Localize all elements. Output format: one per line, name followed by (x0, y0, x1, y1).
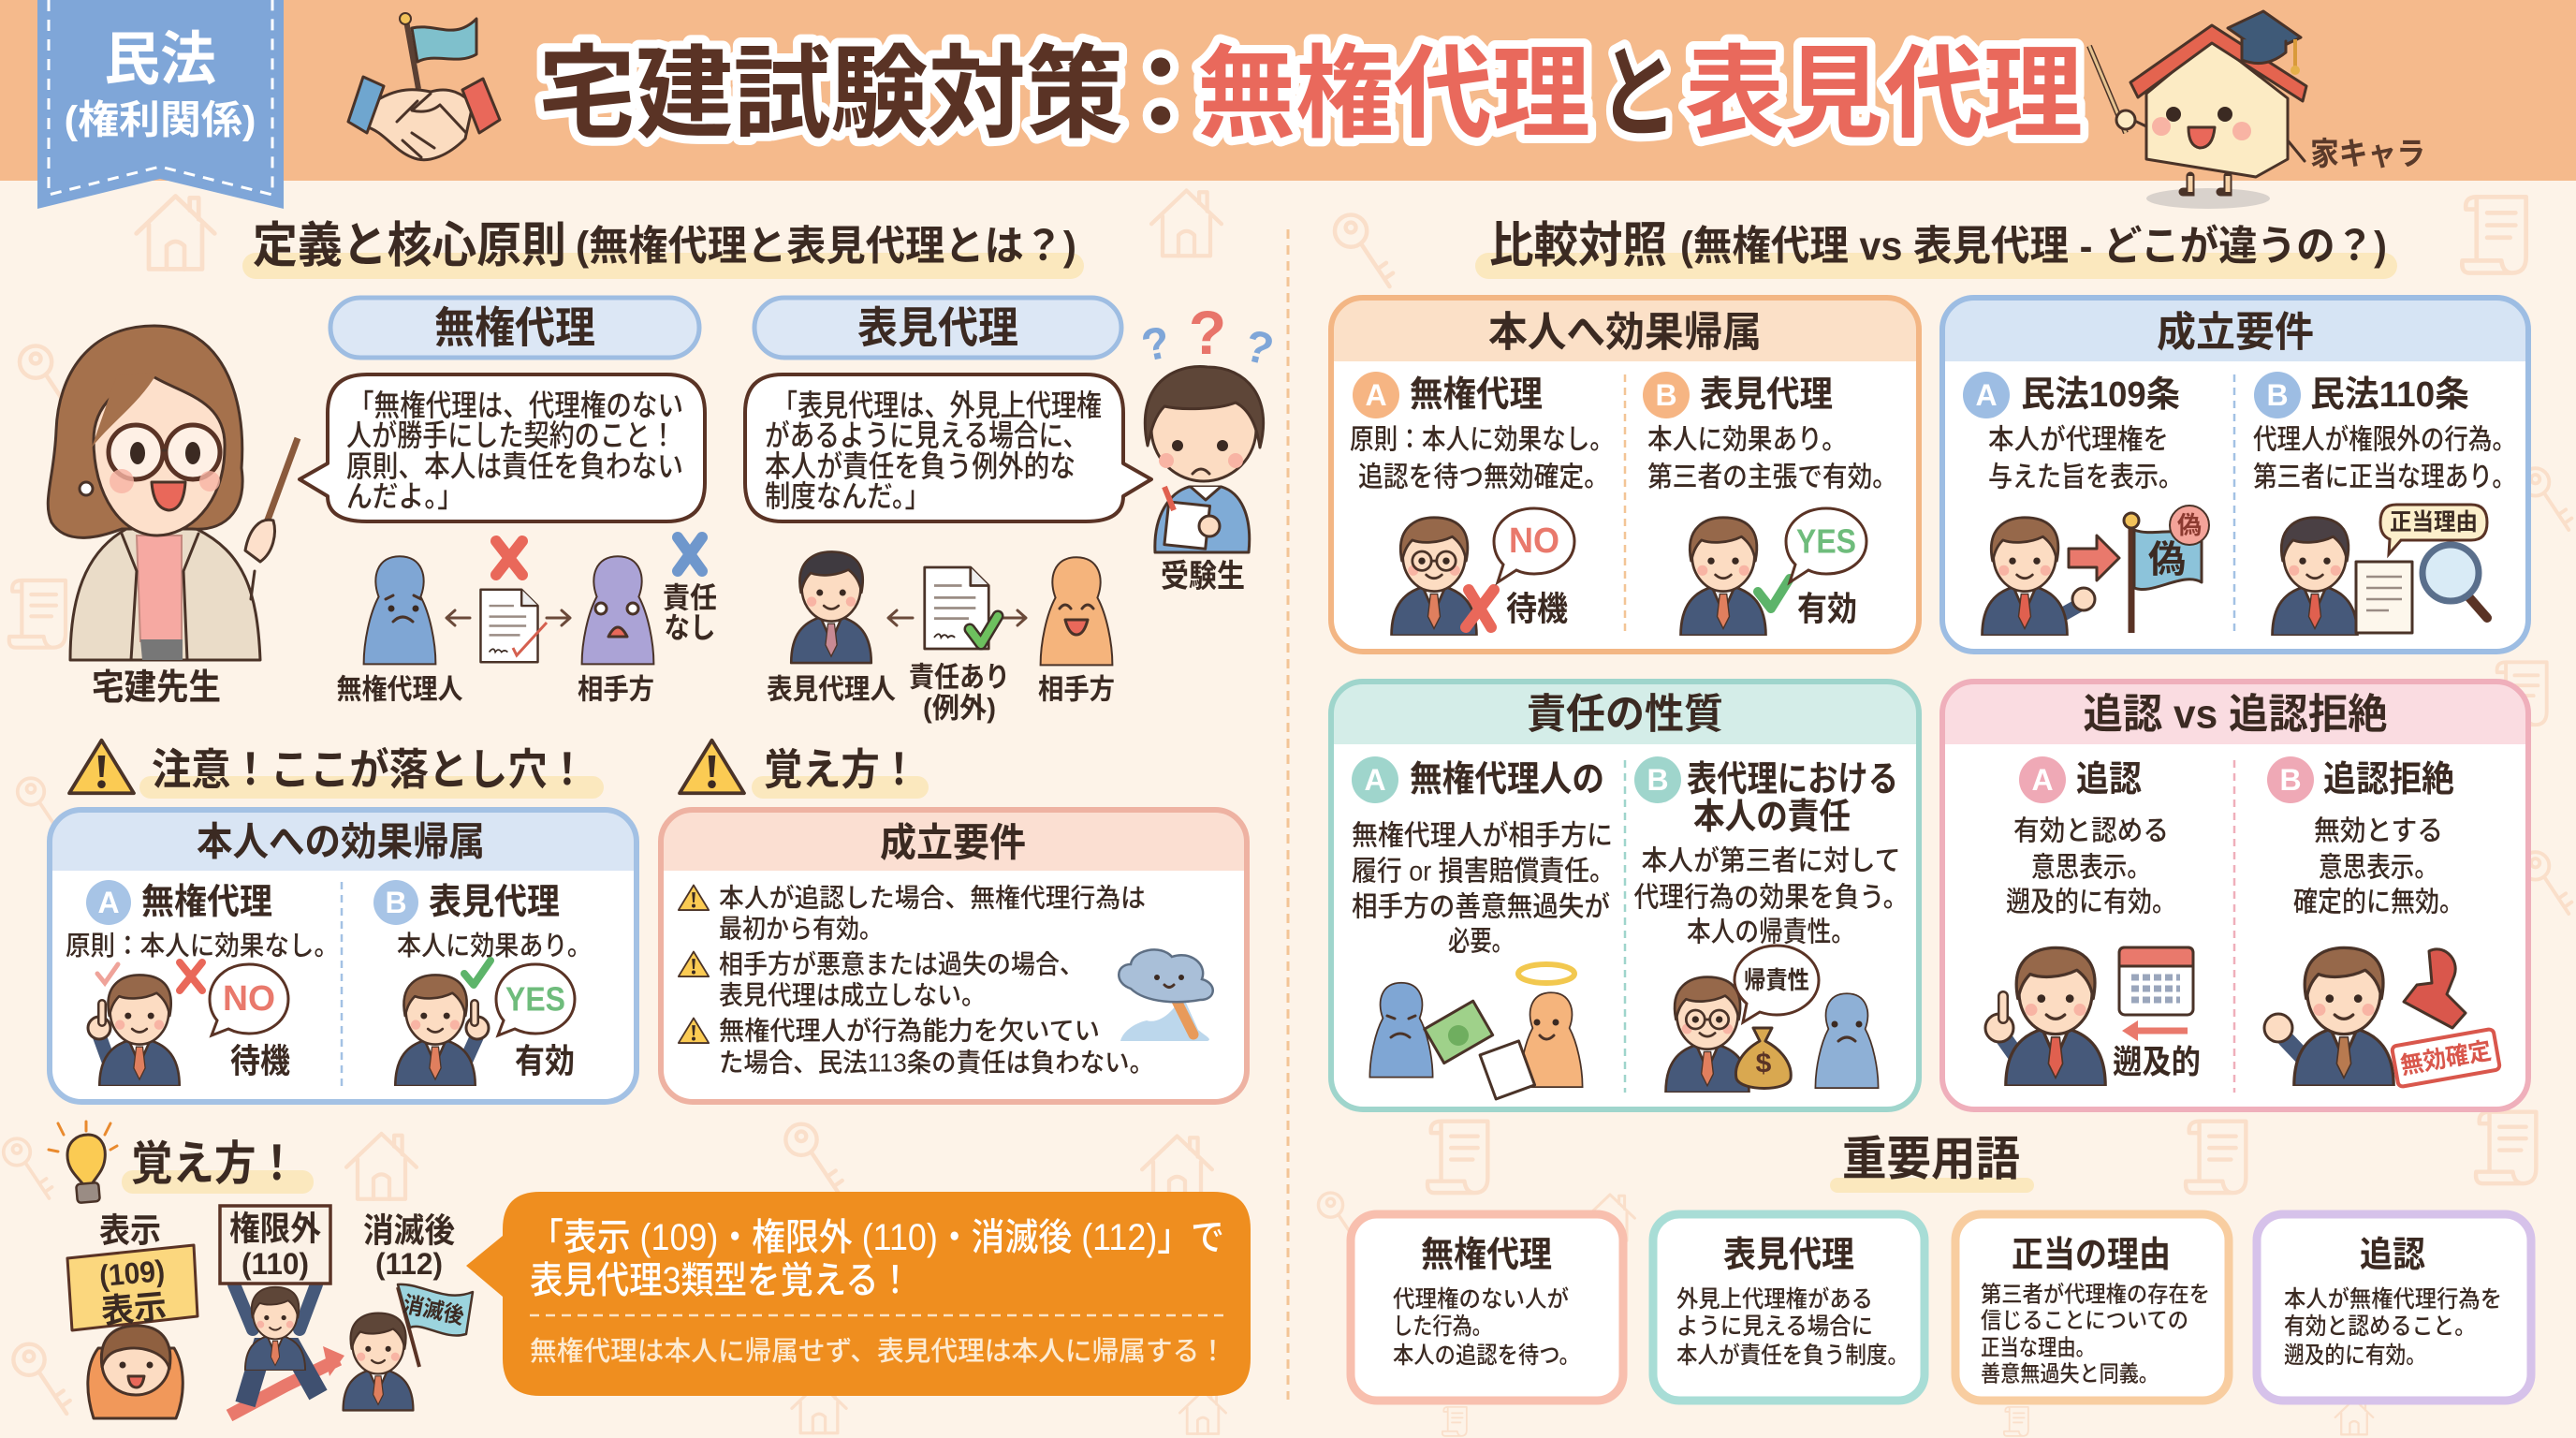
panel: 成立要件 cautions: 成立要件 (880, 820, 1026, 865)
column B: 無効確定 (2398, 1036, 2494, 1079)
term card: 表見代理: 外見上代理権がある (1676, 1286, 1873, 1313)
term card: 正当の理由: 第三者が代理権の存在を (1981, 1283, 2210, 1307)
character: student: ? (1189, 298, 1226, 367)
heading: memory tips (680, 741, 929, 799)
section heading: definitions: 定義と核心原則 (253, 219, 566, 273)
term card: 表見代理: ように見える場合に (1676, 1313, 1873, 1340)
column B (1634, 756, 1908, 1093)
bullet 1: 最初から有効。 (719, 914, 883, 944)
speech bubble: 表見代理: 「表見代理は、外見上代理権 (772, 389, 1102, 422)
column B: 民法110条 (2310, 375, 2469, 415)
column A: 原則：本人に効果なし。 (66, 931, 339, 961)
column A: 与えた旨を表示。 (1988, 462, 2183, 492)
arrows and contract: 責任あり (909, 663, 1010, 693)
mnemonic figure: 権限外: 権限外 (229, 1210, 321, 1247)
mnemonic figure: 消滅後: (112) (375, 1247, 443, 1281)
term card: 表見代理: 本人が責任を負う制度。 (1676, 1343, 1909, 1369)
section heading: comparison: 比較対照 (1489, 219, 1667, 273)
column B: 有効 (1797, 590, 1857, 627)
title (538, 37, 2083, 150)
column A: 無権代理 (1410, 375, 1543, 415)
column A: 追認を待つ無効確定。 (1358, 462, 1609, 492)
pill: 無権代理 (330, 298, 699, 358)
column A: A (97, 886, 120, 919)
arrows and contract (888, 567, 1026, 725)
speech bubble: 表見代理 (745, 374, 1151, 521)
column B (2264, 756, 2500, 1087)
column A: A (1365, 378, 1387, 412)
term card: 無権代理 (1351, 1214, 1623, 1401)
column B: $ (1756, 1049, 1772, 1078)
term card: 無権代理: した行為。 (1393, 1313, 1492, 1340)
column A: 履行 or 損害賠償責任。 (1352, 856, 1615, 888)
column B: YES (505, 979, 565, 1019)
card: 成立要件: 成立要件 (2157, 309, 2314, 356)
column A: 遡及的 (2113, 1045, 2201, 1080)
相手方 figure (578, 556, 654, 706)
term card: 追認 (2257, 1214, 2531, 1401)
speech bubble: 無権代理: 人が勝手にした契約のこと！ (346, 418, 676, 452)
term card: 無権代理: 本人の追認を待つ。 (1393, 1343, 1580, 1369)
column A: 追認 (2076, 760, 2142, 800)
character: teacher (48, 326, 298, 708)
card: 本人へ効果帰属 (1331, 298, 1919, 652)
column B: B (1655, 378, 1677, 412)
mascot: house character (2089, 11, 2425, 209)
character: teacher: 宅建先生 (92, 668, 221, 708)
no liability note: なし (665, 612, 715, 644)
column A (1352, 756, 1615, 1099)
column B: 表代理における (1687, 760, 1898, 800)
diagram: 表見代理 relation (767, 551, 1115, 725)
no liability note (663, 537, 717, 644)
term card: 正当の理由: 正当な理由。 (1981, 1335, 2095, 1361)
表見代理人 figure (767, 551, 896, 706)
mnemonic figure: 権限外: (110) (242, 1247, 309, 1281)
column A: NO (223, 979, 275, 1019)
heading: caution (69, 741, 604, 799)
speech bubble: 表見代理: 本人が責任を負う例外的な (765, 449, 1076, 483)
callout: mnemonic summary: 無権代理は本人に帰属せず、表見代理は本人に帰属する！ (530, 1336, 1226, 1367)
character: student: 受験生 (1161, 559, 1245, 594)
mnemonic figure: 権限外 (220, 1206, 344, 1416)
column A: 待機 (1506, 590, 1568, 627)
column B: 代理行為の効果を負う。 (1634, 882, 1908, 914)
column B: 第三者の主張で有効。 (1647, 462, 1897, 492)
column A: 民法109条 (2021, 375, 2180, 415)
heading: memory tips with bulb (49, 1122, 314, 1203)
mnemonic figure: 消滅後: 消滅後 (401, 1292, 466, 1329)
表見代理人 figure: 表見代理人 (767, 674, 896, 706)
character: student (1137, 298, 1279, 594)
title: ： (1110, 37, 1211, 150)
column B: B (2266, 378, 2289, 412)
term card: 表見代理 (1653, 1214, 1925, 1401)
card: 追認 vs 追認拒絶 (1942, 682, 2528, 1109)
card: 本人へ効果帰属: 本人へ効果帰属 (1488, 309, 1762, 356)
speech bubble: 無権代理 (300, 374, 705, 521)
term card: 無権代理: 代理権のない人が (1393, 1286, 1569, 1313)
column A: NO (1509, 521, 1559, 561)
column B: 追認拒絶 (2323, 760, 2454, 800)
mnemonic figure: 消滅後: 消滅後 (363, 1211, 455, 1249)
category ribbon: (権利関係) (64, 97, 256, 142)
pill: 無権代理: 無権代理 (434, 303, 595, 352)
column A: 遡及的に有効。 (2006, 888, 2176, 917)
column A: 原則：本人に効果なし。 (1350, 425, 1614, 455)
term card: 追認: 追認 (2360, 1236, 2425, 1275)
character: student: ? (1137, 317, 1175, 372)
pill: 表見代理 (754, 298, 1121, 358)
無権代理人 figure: 無権代理人 (337, 674, 462, 706)
column B: 本人の帰責性。 (1687, 917, 1855, 947)
card: 成立要件 (1942, 298, 2528, 652)
term card: 正当の理由: 信じることについての (1981, 1309, 2188, 1333)
column B: 表見代理 (1700, 375, 1833, 415)
bullet 3: 無権代理人が行為能力を欠いてい (719, 1017, 1100, 1045)
column A: 必要。 (1448, 927, 1514, 957)
mnemonic figure: 消滅後 (344, 1211, 473, 1410)
bullet 2: 相手方が悪意または過失の場合、 (719, 949, 1084, 979)
column A: 無権代理人の (1410, 760, 1604, 800)
character: student: ? (1239, 321, 1279, 375)
column B: B (2279, 763, 2302, 797)
bullet 1 (679, 884, 1146, 944)
column A: 偽 (2148, 539, 2186, 580)
section heading: comparison (1475, 219, 2397, 279)
column A: 本人が代理権を (1988, 425, 2169, 455)
相手方 figure: 相手方 (1038, 674, 1115, 706)
column A: 意思表示。 (2031, 852, 2151, 884)
column B: 意思表示。 (2319, 852, 2438, 884)
column A: 待機 (230, 1041, 290, 1080)
bullet 1: 本人が追認した場合、無権代理行為は (719, 884, 1146, 912)
arrows and contract: (例外) (923, 693, 996, 725)
column A (1985, 756, 2201, 1086)
category ribbon (37, 0, 284, 209)
speech bubble: 無権代理: んだよ。」 (346, 479, 463, 513)
term card: 追認: 有効と認めること。 (2284, 1313, 2476, 1340)
column B: 本人の責任 (1693, 798, 1851, 837)
bullet 3: た場合、民法113条の責任は負わない。 (719, 1049, 1154, 1077)
column B: 表見代理 (429, 883, 560, 922)
title: 宅建試験対策 (538, 37, 1123, 150)
column A (1963, 372, 2209, 636)
column A: A (1975, 378, 1998, 412)
column A: A (2031, 763, 2054, 797)
term card: 無権代理: 無権代理 (1421, 1236, 1552, 1275)
column A: 無権代理 (141, 883, 272, 922)
no liability note: 責任 (663, 582, 717, 614)
section heading: definitions (242, 219, 1084, 279)
term card: 追認: 遡及的に有効。 (2284, 1343, 2426, 1369)
panel: 本人への効果帰属: 本人への効果帰属 (197, 820, 485, 863)
panel: 本人への効果帰属 (50, 810, 637, 1102)
column B: 正当理由 (2390, 509, 2478, 536)
column A: 無権代理人が相手方に (1352, 820, 1613, 852)
header band (0, 0, 2576, 209)
column A (1350, 372, 1614, 636)
無権代理人 figure (337, 556, 462, 706)
icon: light bulb (49, 1122, 117, 1203)
column B: 無効とする (2314, 816, 2443, 846)
heading: key terms: 重要用語 (1842, 1133, 2020, 1185)
mnemonic figure: 表示: 表示 (99, 1211, 161, 1249)
term card: 正当の理由: 正当の理由 (2012, 1236, 2171, 1275)
icon: storm cloud (1119, 949, 1213, 1041)
title: と (1599, 37, 1677, 150)
column B: 第三者に正当な理あり。 (2253, 462, 2516, 492)
term card: 正当の理由: 善意無過失と同義。 (1981, 1361, 2159, 1387)
column B: B (1647, 763, 1669, 797)
section heading: comparison: (無権代理 vs 表見代理 - どこが違うの？) (1680, 223, 2387, 270)
column B: 本人に効果あり。 (1647, 425, 1847, 455)
column B: 本人に効果あり。 (397, 931, 592, 961)
column B: B (385, 886, 407, 919)
heading: memory tips with bulb: 覚え方！ (131, 1137, 298, 1190)
column A: 相手方の善意無過失が (1352, 891, 1610, 923)
icon: handshake with flag (348, 13, 500, 160)
speech bubble: 表見代理: 制度なんだ。」 (765, 479, 930, 513)
bullet 2: 表見代理は成立しない。 (719, 981, 986, 1009)
panel: 成立要件 cautions (661, 810, 1247, 1102)
callout: mnemonic summary (466, 1192, 1251, 1396)
term card: 追認: 本人が無権代理行為を (2284, 1286, 2502, 1313)
heading: caution: 注意！ここが落とし穴！ (152, 745, 587, 794)
card: 責任の性質: 責任の性質 (1527, 691, 1723, 738)
column B (2253, 372, 2516, 636)
speech bubble: 無権代理: 「無権代理は、代理権のない (348, 389, 683, 422)
column B: 本人が第三者に対して (1642, 846, 1900, 876)
arrows and contract (446, 541, 570, 662)
card: 追認 vs 追認拒絶: 追認 vs 追認拒絶 (2084, 691, 2387, 738)
mascot: house character: 家キャラ (2310, 137, 2425, 172)
bullet 3 (679, 1017, 1154, 1077)
bullet 2 (679, 949, 1084, 1009)
mnemonic figure: 表示 (67, 1211, 198, 1418)
column A: 有効と認める (2013, 816, 2169, 846)
title: 表見代理 (1685, 37, 2083, 150)
speech bubble: 表見代理: があるように見える場合に、 (765, 418, 1088, 452)
column A: A (1364, 763, 1386, 797)
term card: 正当の理由 (1955, 1214, 2229, 1401)
column B (1643, 372, 1897, 636)
heading: memory tips: 覚え方！ (764, 745, 918, 794)
mnemonic figure: 表示: (109) (98, 1254, 166, 1293)
相手方 figure (1038, 557, 1115, 706)
column B: 代理人が権限外の行為。 (2253, 425, 2516, 455)
mnemonic figure: 表示: 表示 (99, 1287, 168, 1330)
column B (373, 880, 592, 1086)
speech bubble: 無権代理: 原則、本人は責任を負わない (346, 449, 683, 483)
diagram: 無権代理 relation (337, 537, 717, 706)
column B: 帰責性 (1744, 966, 1809, 994)
card: 責任の性質 (1331, 682, 1919, 1109)
pill: 表見代理: 表見代理 (857, 303, 1018, 352)
column B: 確定的に無効。 (2293, 888, 2464, 917)
column B: 有効 (515, 1041, 575, 1080)
column A: 偽 (2177, 511, 2202, 539)
column A (66, 880, 339, 1086)
column B: YES (1796, 522, 1856, 560)
callout: mnemonic summary: 表見代理3類型を覚える！ (530, 1260, 912, 1301)
term card: 表見代理: 表見代理 (1723, 1236, 1854, 1275)
callout: mnemonic summary: 「表示 (109)・権限外 (110)・消滅後 (112)」で (530, 1217, 1224, 1258)
title: 無権代理 (1197, 37, 1590, 150)
section heading: definitions: (無権代理と表見代理とは？) (576, 223, 1076, 270)
category ribbon: 民法 (104, 28, 216, 92)
相手方 figure: 相手方 (578, 674, 654, 706)
